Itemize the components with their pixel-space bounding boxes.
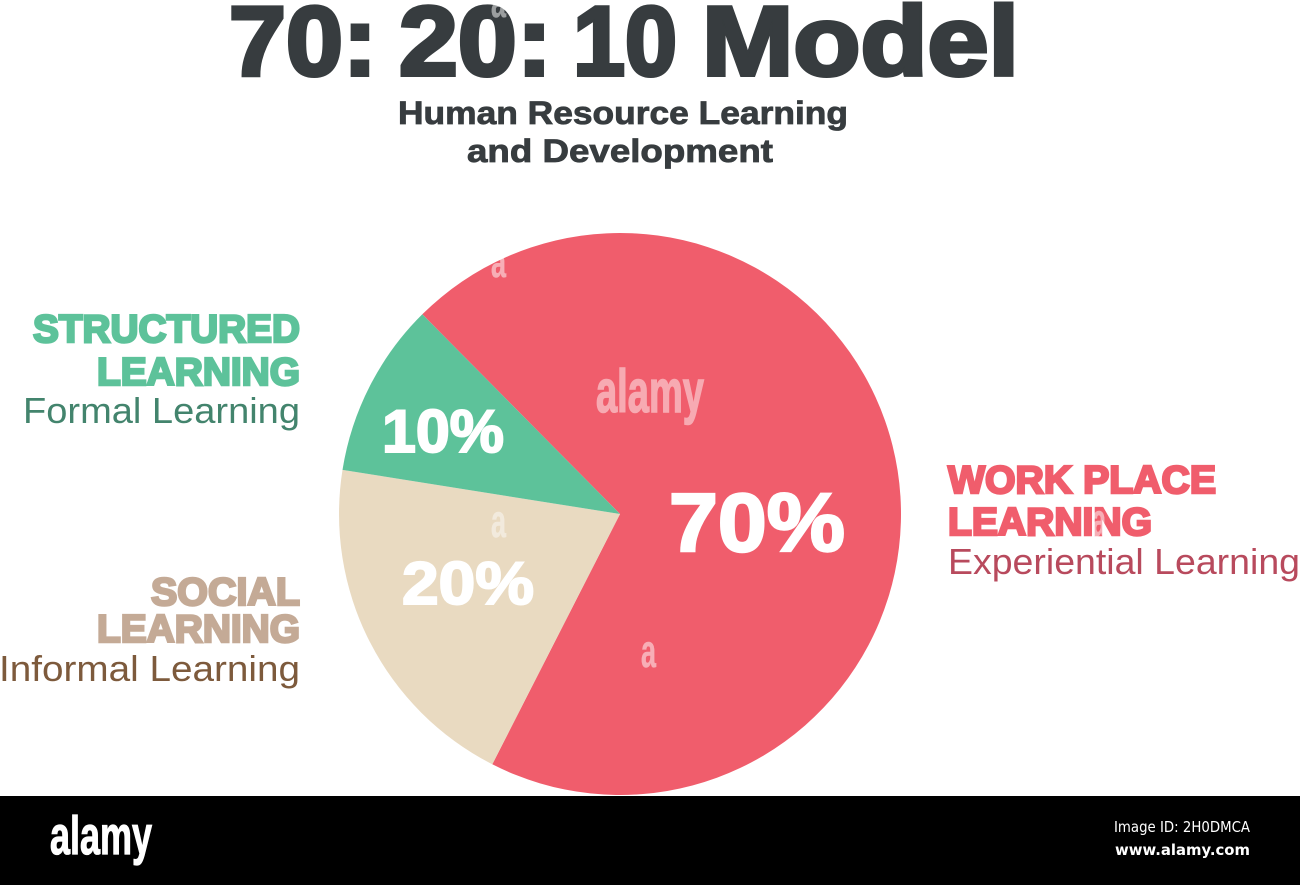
watermark: a [641,625,656,677]
label: work place learning: Experiential Learning [948,541,1300,582]
subtitle [398,95,848,169]
label: 10%: 10% [382,398,504,465]
label: work place learning [948,459,1300,582]
label: structured learning: STRUCTURED [33,308,300,351]
subtitle: Human Resource Learning [398,95,848,131]
label: work place learning: WORK PLACE [948,459,1216,502]
slice: 70% work place learning [422,233,901,795]
watermark: a [1092,494,1106,546]
footer logo: alamy [50,806,152,866]
label: structured learning: Formal Learning [23,390,300,431]
label: social learning [0,571,300,689]
label: structured learning [23,308,300,431]
label: social learning: LEARNING [97,608,300,651]
website: www.alamy.com [1115,841,1250,859]
watermark [491,0,1106,677]
watermark: a [491,495,506,547]
label: work place learning: LEARNING [948,501,1152,544]
watermark: alamy [596,358,704,425]
slice: 10% structured learning [342,314,620,514]
label: 20%: 20% [402,550,534,617]
slice: 20% social learning [339,470,620,764]
pie chart [339,233,901,795]
label: social learning: SOCIAL [151,571,300,614]
label: social learning: Informal Learning [0,648,300,689]
image id: Image ID: 2H0DMCA [1114,818,1251,836]
label: 70%: 70% [669,476,845,569]
title [229,0,1019,96]
label: structured learning: LEARNING [97,351,300,394]
watermark: a [491,238,506,287]
subtitle: and Development [467,133,773,169]
footer bar [0,796,1300,885]
